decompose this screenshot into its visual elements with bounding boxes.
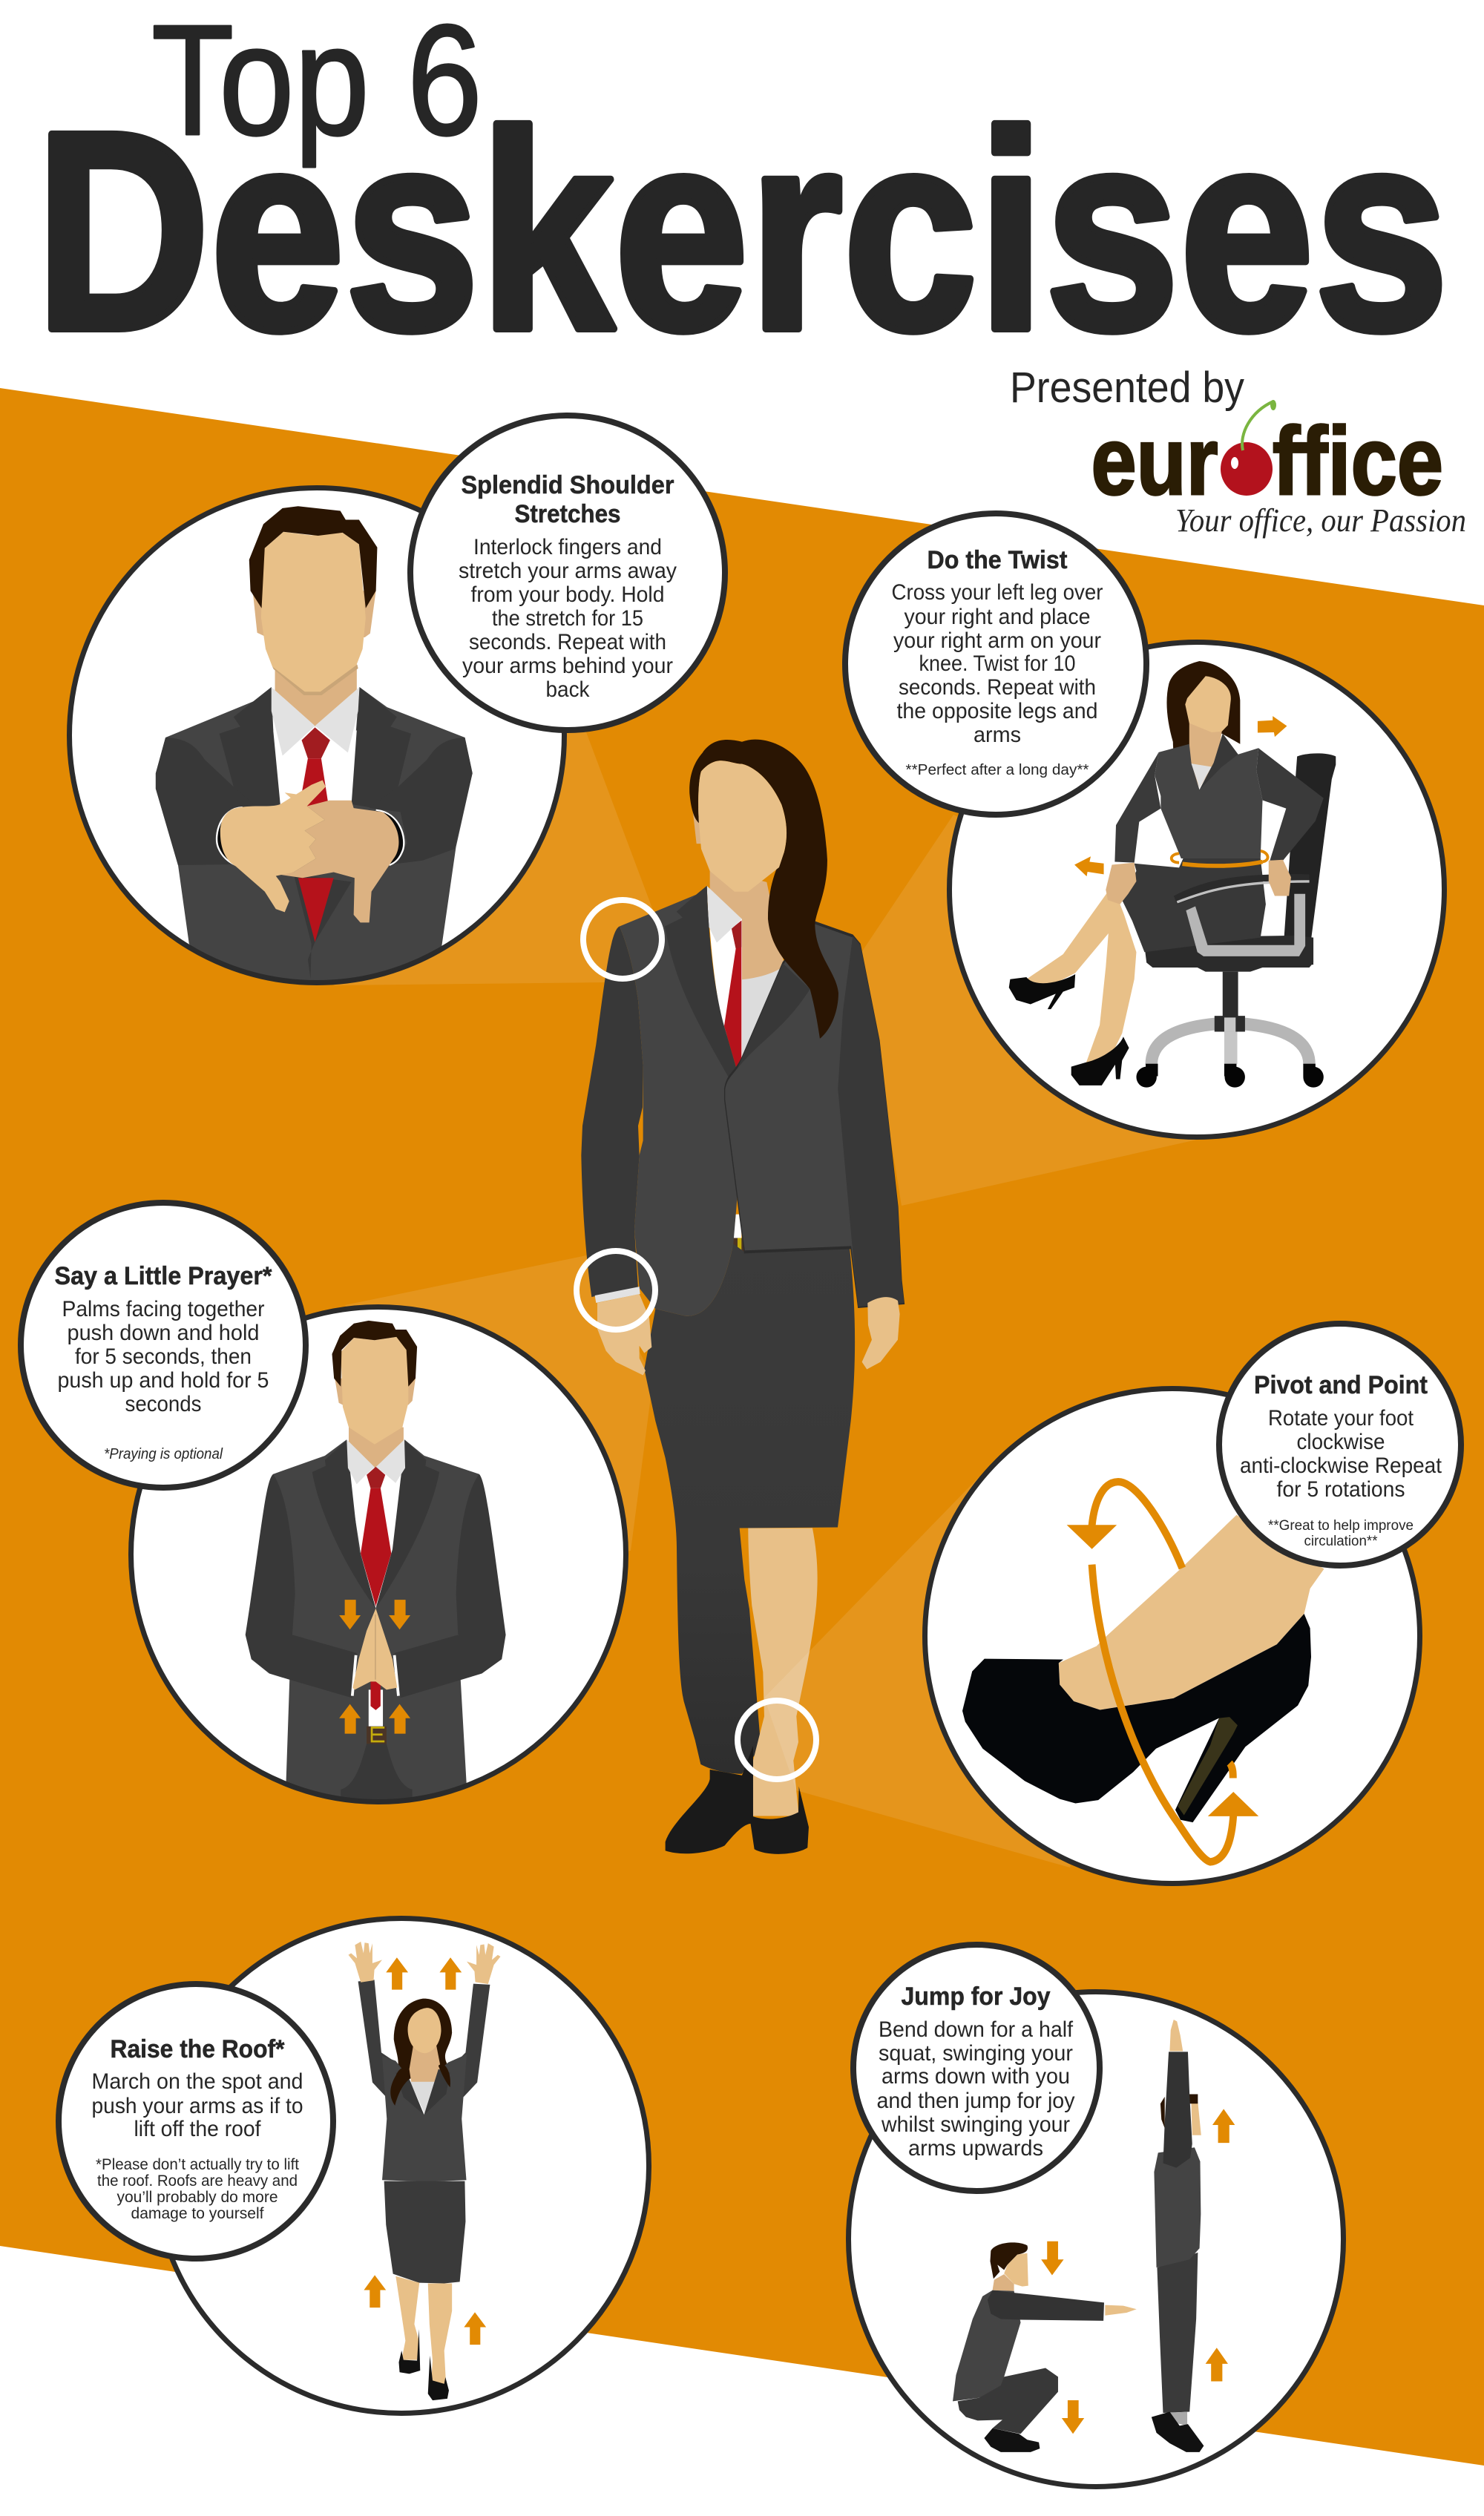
instructions: seconds. Repeat with (469, 630, 666, 654)
icon: direction arrows (1041, 2109, 1235, 2434)
instructions: arms down with you (881, 2064, 1070, 2089)
instructions: arms upwards (908, 2136, 1043, 2161)
instructions (892, 580, 1103, 747)
icon: down arrows (339, 1600, 410, 1629)
panel: Say a Little Prayer (21, 1203, 626, 1810)
logo tagline: Your office, our Passion (1175, 502, 1466, 539)
instructions: Bend down for a half (879, 2017, 1074, 2042)
icon: orange waist twist arrow (1172, 851, 1268, 866)
instructions: the opposite legs and (896, 699, 1098, 723)
instructions: your right arm on your (893, 628, 1101, 653)
instructions: push up and hold for 5 (58, 1368, 269, 1393)
heading: Do the Twist (928, 546, 1067, 574)
instructions: push your arms as if to (92, 2094, 303, 2118)
illustration circle outline (154, 1919, 649, 2413)
panel: Jump for Joy (849, 1945, 1343, 2487)
presented by label: Presented by (1010, 364, 1244, 412)
text bubble: Raise the Roof (59, 1984, 333, 2259)
instructions (92, 2069, 303, 2141)
heading (462, 471, 674, 528)
instructions: arms (974, 723, 1021, 747)
footnote: *Praying is optional (104, 1446, 223, 1462)
heading: Pivot and Point (1254, 1371, 1428, 1399)
instructions: back (546, 677, 590, 702)
icon: up arrows (339, 1704, 410, 1734)
instructions: squat, swinging your (879, 2041, 1073, 2066)
footnote: *Please don’t actually try to lift (96, 2156, 299, 2173)
illustration circle outline (849, 1991, 1343, 2487)
highlight rings on the figure (577, 900, 816, 1779)
instructions: stretch your arms away (459, 559, 677, 583)
text bubble: Do the Twist (845, 513, 1146, 815)
instructions: for 5 rotations (1276, 1477, 1405, 1502)
instructions: Palms facing together (62, 1297, 265, 1321)
instructions: the stretch for 15 (492, 606, 643, 631)
footnote: **Great to help improve (1268, 1518, 1414, 1534)
illustration circle: seated twist (950, 643, 1444, 1137)
icon: left arrow (1074, 856, 1104, 876)
icon: cherry (1221, 400, 1276, 496)
instructions: for 5 seconds, then (75, 1344, 252, 1369)
instructions (1240, 1406, 1442, 1502)
icon: right arrow (1258, 716, 1287, 737)
illustration circle outline (131, 1307, 626, 1801)
icon: up arrows (364, 1957, 486, 2345)
figure: woman twisting on an office chair (1009, 661, 1336, 1088)
instructions: seconds (125, 1392, 202, 1416)
beam to the foot circle (764, 1477, 1113, 1868)
instructions: clockwise (1297, 1430, 1385, 1454)
figure: squatting and jumping man (953, 2020, 1235, 2452)
figure: foot in high heel with rotation arrows (962, 1482, 1324, 1862)
panel: Splendid Shoulder Stretches (70, 415, 725, 994)
footnote: damage to yourself (131, 2205, 264, 2222)
instructions: seconds. Repeat with (899, 675, 1096, 700)
instructions (58, 1297, 269, 1416)
instructions (459, 535, 677, 702)
icon: rotation arrow (1067, 1482, 1258, 1862)
instructions: Interlock fingers and (473, 535, 662, 559)
illustration circle: foot (925, 1389, 1419, 1883)
title (36, 0, 1448, 389)
central woman figure (581, 740, 904, 1854)
footnote: you’ll probably do more (117, 2189, 278, 2206)
logo word: ffice: ffice (1273, 407, 1443, 515)
instructions: and then jump for joy (877, 2089, 1074, 2113)
illustration circle: raise the roof (154, 1919, 649, 2413)
panel: Raise the Roof (59, 1919, 649, 2413)
instructions: lift off the roof (134, 2117, 261, 2141)
text bubble: Jump for Joy (853, 1945, 1100, 2191)
footnote: **Perfect after a long day** (905, 762, 1089, 778)
illustration circle: shoulder stretch (70, 488, 564, 982)
footnote: the roof. Roofs are heavy and (97, 2172, 298, 2190)
heading: Say a Little Prayer* (55, 1262, 272, 1290)
squatting figure (953, 2242, 1137, 2452)
illustration circle outline (925, 1389, 1420, 1883)
figure: woman with arms raised (349, 1942, 501, 2400)
text bubble: Pivot and Point (1219, 1324, 1461, 1566)
instructions: knee. Twist for 10 (919, 651, 1076, 676)
instructions: whilst swinging your (881, 2112, 1070, 2137)
footnote (96, 2156, 299, 2222)
instructions: from your body. Hold (470, 582, 665, 607)
heading: Jump for Joy (901, 1983, 1051, 2011)
heading: Splendid Shoulder (462, 471, 674, 499)
figure: man with palms pressed together (246, 1321, 506, 1810)
instructions: Cross your left leg over (892, 580, 1103, 605)
heading: Raise the Roof* (110, 2035, 285, 2063)
instructions: push down and hold (67, 1321, 260, 1345)
instructions: anti-clockwise Repeat (1240, 1454, 1442, 1478)
instructions: your arms behind your (462, 654, 673, 678)
panel: Do the Twist (845, 513, 1444, 1137)
logo word: eur: eur (1091, 407, 1218, 515)
footnote (1268, 1518, 1414, 1549)
sponsor logo block (1010, 364, 1466, 539)
standing figure (1152, 2020, 1204, 2452)
instructions (877, 2017, 1074, 2161)
footnote: circulation** (1304, 1534, 1378, 1549)
text bubble: Splendid Shoulder Stretches (410, 415, 725, 730)
instructions: Rotate your foot (1268, 1406, 1414, 1431)
figure: man interlocking fingers (156, 506, 473, 994)
panel: Pivot and Point (925, 1324, 1461, 1883)
text bubble: Say a Little Prayer (21, 1203, 306, 1488)
illustration circle: jump (849, 1992, 1343, 2486)
instructions: your right and place (904, 605, 1091, 629)
illustration circle: prayer (131, 1307, 626, 1801)
light beams connecting the figure to the exercise circles (334, 712, 1217, 1558)
instructions: March on the spot and (92, 2069, 303, 2094)
heading: Stretches (515, 500, 620, 528)
illustration circle outline (70, 488, 564, 982)
illustration circle outline (950, 643, 1444, 1137)
